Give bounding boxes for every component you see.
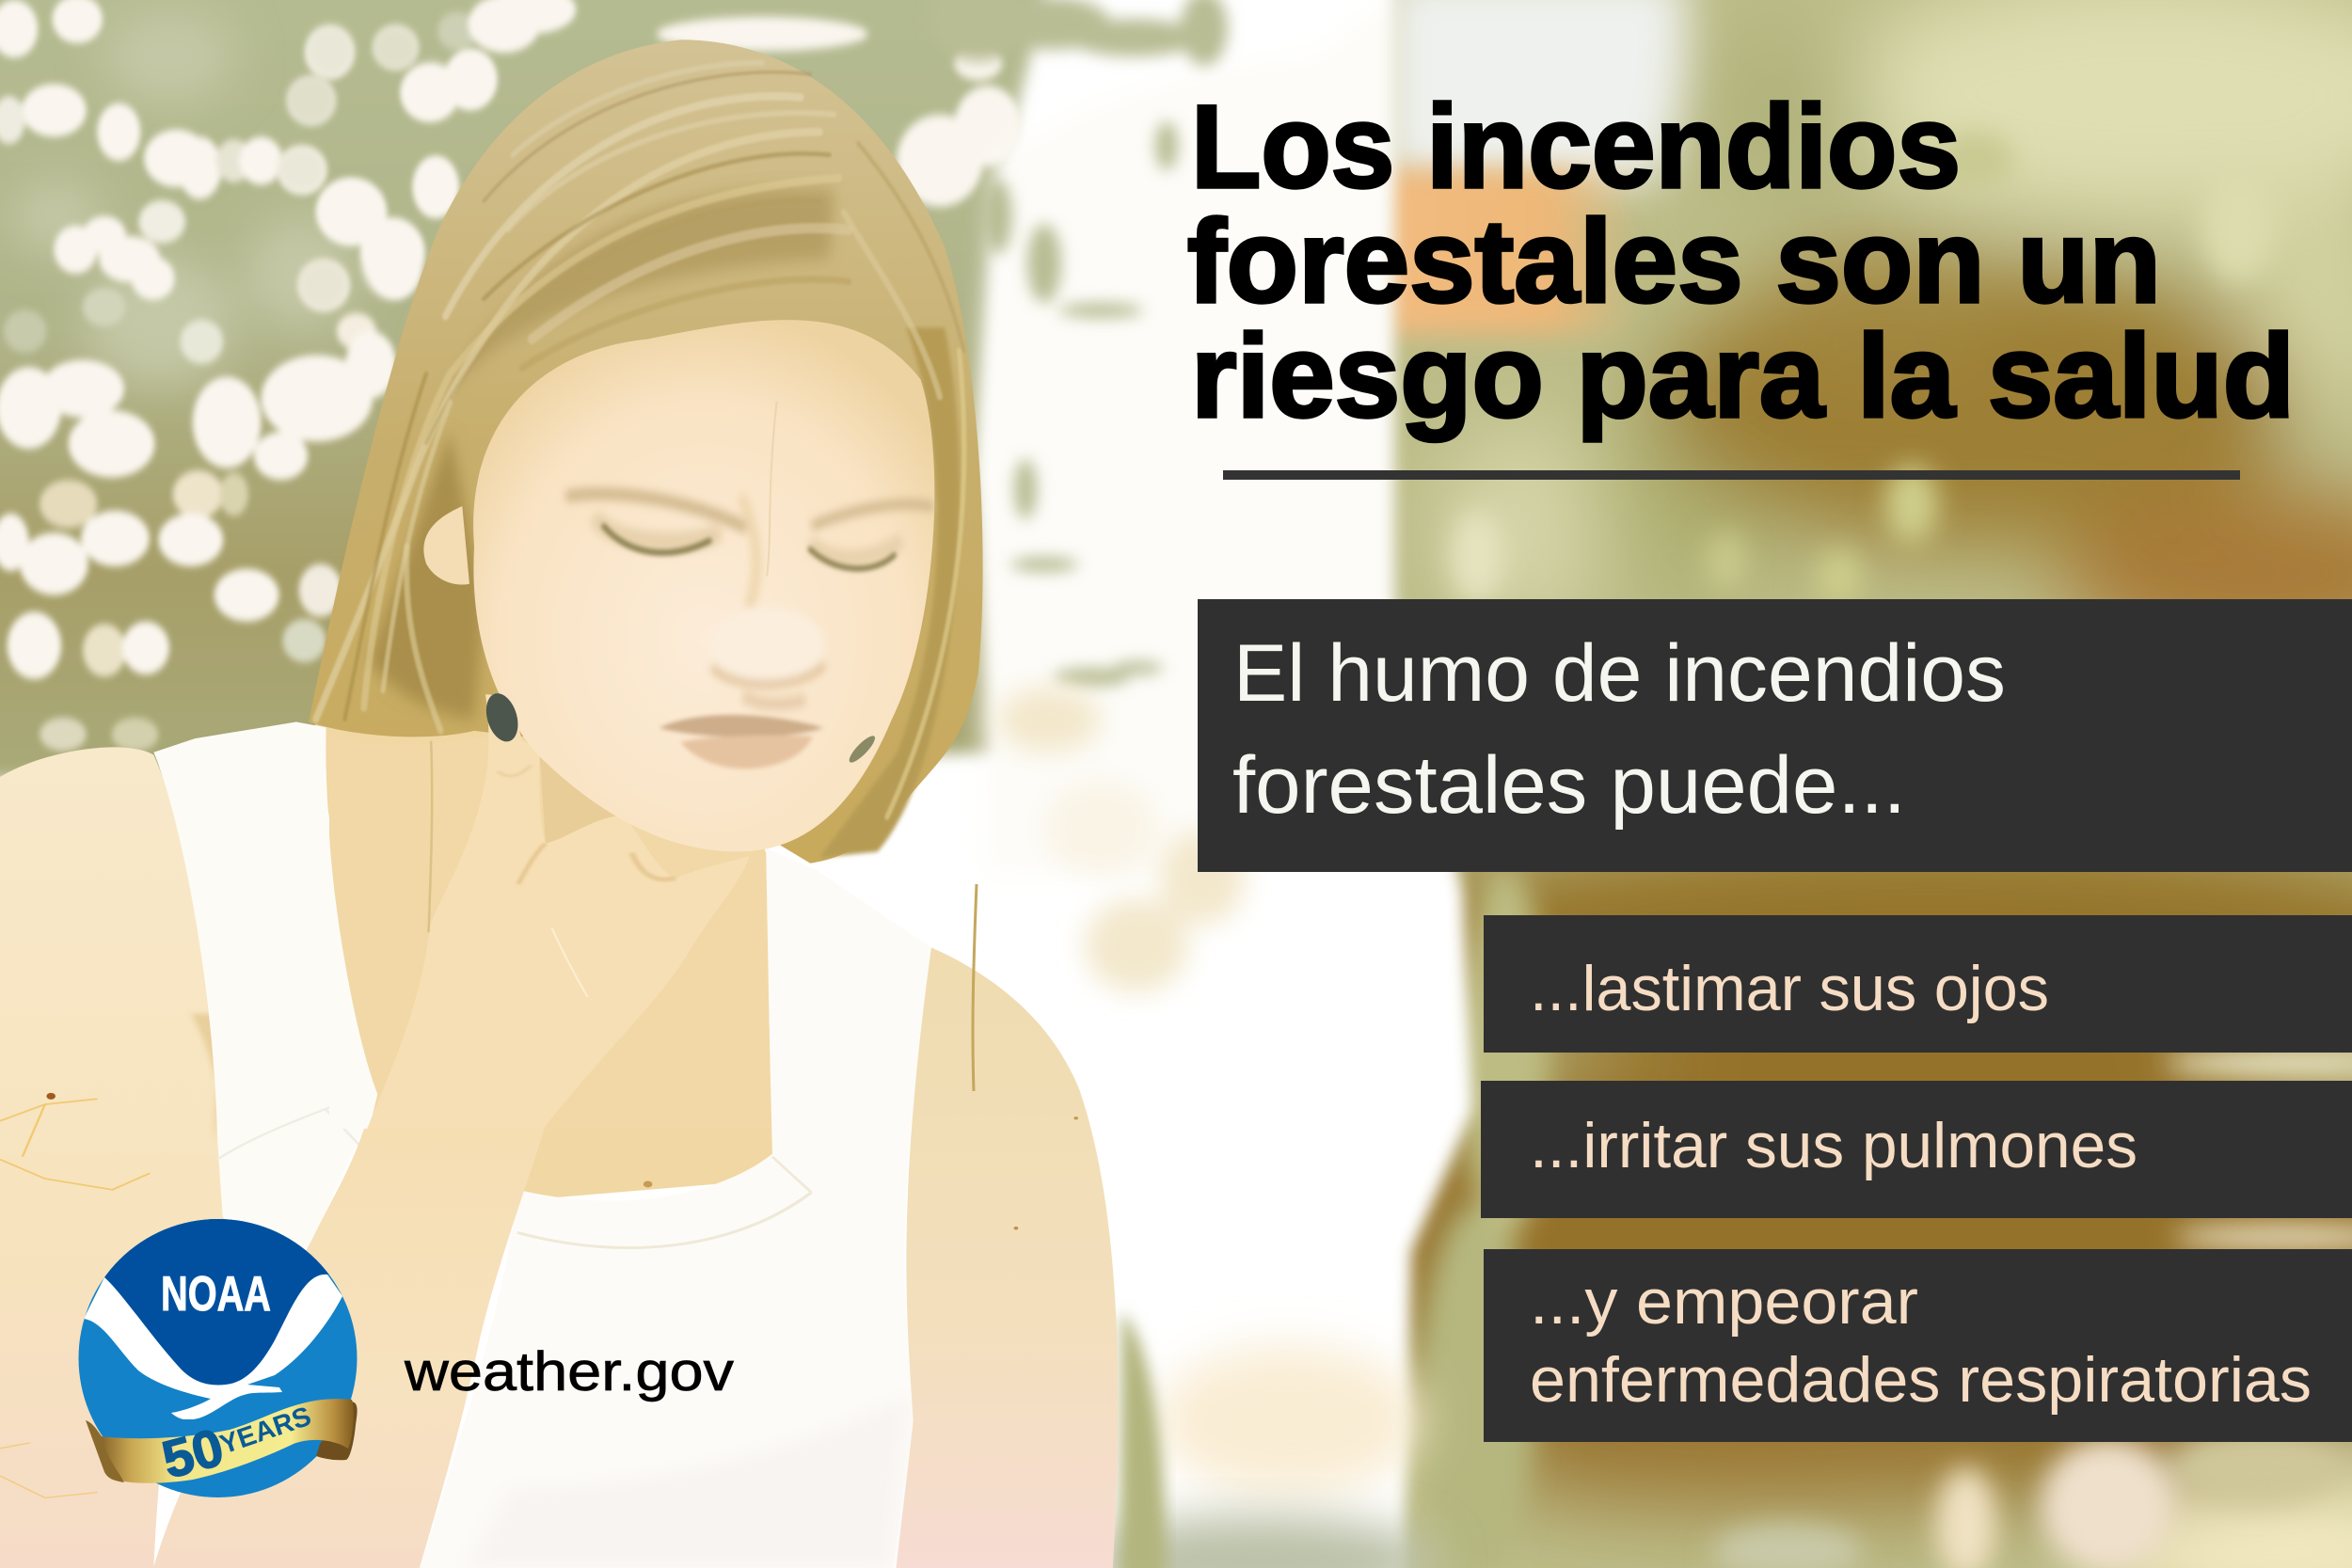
background: green foliage left [0,0,1054,781]
panel: worsen respiratory illness [1484,1249,2352,1442]
panel: hurt eyes: ...lastimar sus ojos [1530,953,2049,1024]
panel: hurt eyes [1484,915,2352,1053]
NOAA 50 years logo [75,1204,358,1497]
title: riesgo para la salud [1191,311,2295,442]
ear [423,506,469,585]
logo: dark blue upper field [104,1219,329,1385]
panel: irritate lungs: ...irritar sus pulmones [1530,1110,2137,1181]
title: forestales son un [1187,197,2161,327]
eyebrows and eyes [570,494,930,604]
left arm [0,747,225,1568]
title: Los incendios [1191,82,1961,213]
chest skin [315,717,780,1200]
panel: irritate lungs [1481,1081,2352,1218]
ribbon: 50: 50 [156,1417,230,1490]
woman: neck and hand [329,694,771,1129]
website label: weather.gov [404,1341,734,1402]
panel: worsen respiratory illness: enfermedades respiratorias [1530,1344,2312,1416]
background: white foliage gaps [931,0,1411,992]
fingernails [480,688,878,767]
photo: woman [0,40,1118,1568]
hair back [309,40,983,863]
panel: worsen respiratory illness: ...y empeorar [1530,1266,1918,1338]
woman: torso and arms [0,717,1118,1568]
logo: blue disc [79,1219,358,1497]
title rule [1223,470,2240,480]
woman: head [309,40,983,1129]
left strap of tank top [153,722,378,1250]
title [1187,82,2295,442]
panel: smoke intro [1198,599,2352,872]
logo: gold ribbon [86,1399,358,1490]
face [473,320,934,851]
moles and veins [0,1093,1078,1497]
intro text: El humo de incendios [1233,628,2006,719]
logo: NOAA wordmark: NOAA [161,1267,271,1322]
lips [660,715,824,768]
nose [709,607,825,705]
ribbon: YEARS: YEARS [216,1402,315,1461]
right arm [896,947,1118,1568]
logo: white bird [84,1275,342,1419]
lower tank top [420,847,931,1568]
hair strands [316,63,964,931]
forearm [153,1119,548,1568]
intro text: forestales puede... [1232,740,1906,831]
background: bottom centre foliage [1082,1312,1439,1568]
background: blurred trees right [1383,0,2352,1568]
intro text [1232,628,2006,831]
